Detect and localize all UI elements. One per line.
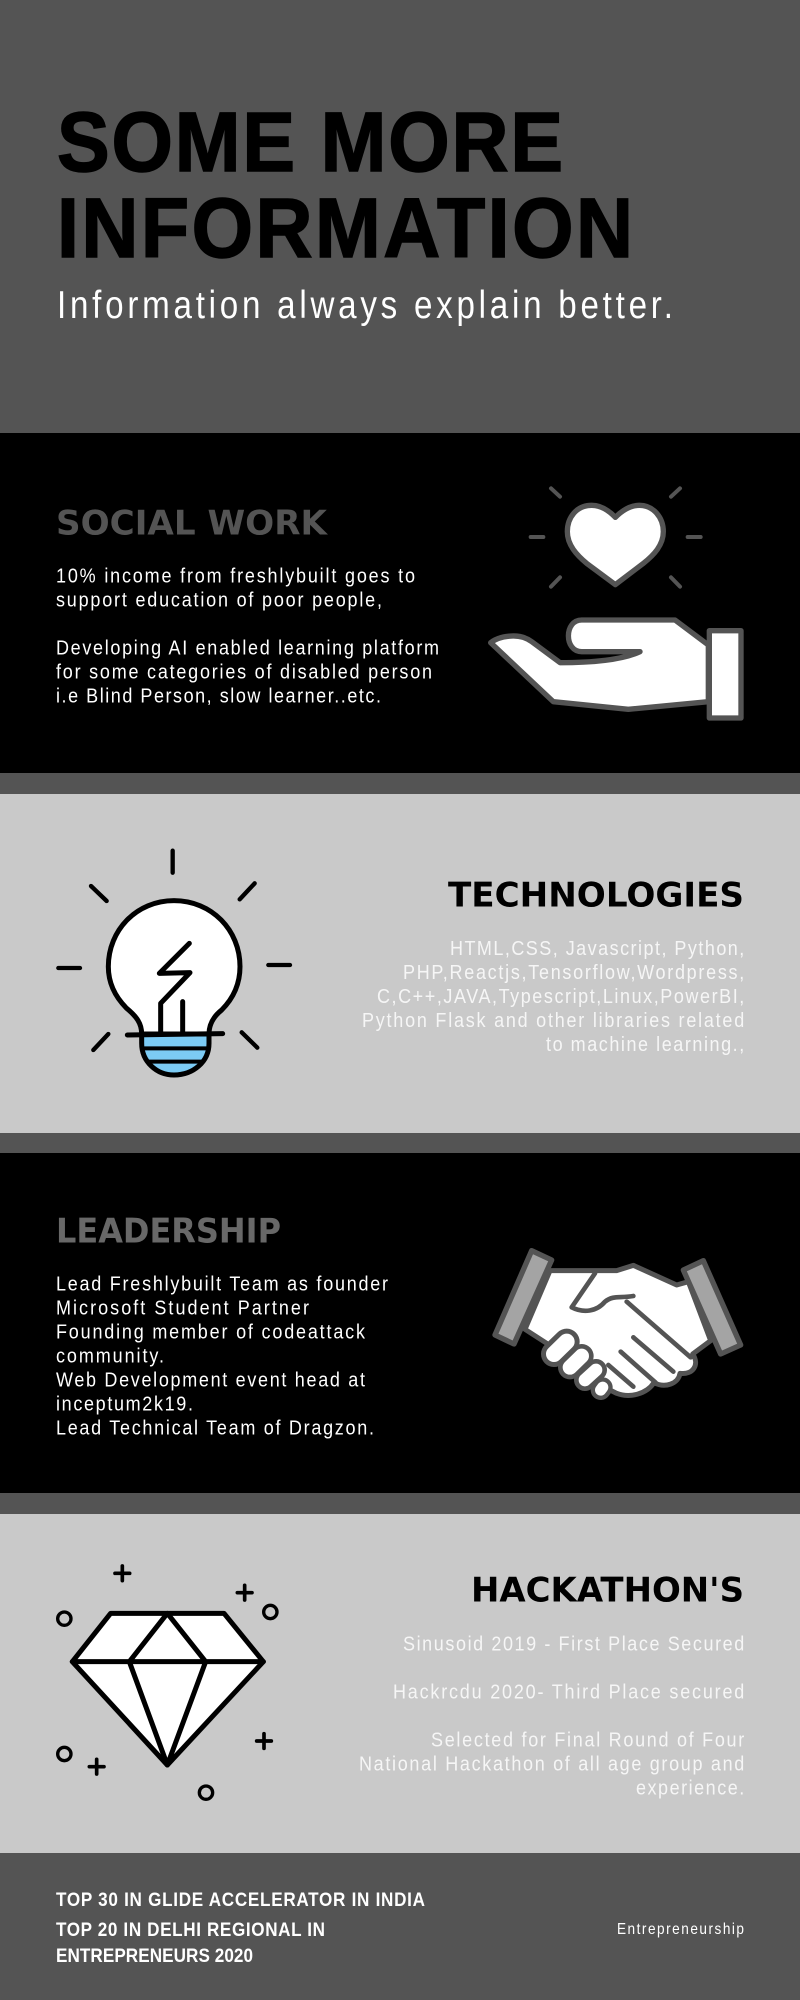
text block: technologies <box>362 938 744 1056</box>
text block: leadership: community. <box>56 1346 164 1368</box>
text block: technologies: to machine learning., <box>546 1034 744 1056</box>
text block: social work <box>56 566 439 708</box>
icon: light bulb <box>58 851 290 1075</box>
text block: social work: 10% income from freshlybuilt goes to <box>56 566 415 588</box>
panel: social work <box>0 433 800 773</box>
heading: hackathons: HACKATHON'S <box>471 1571 744 1610</box>
text block: leadership: Lead Technical Team of Dragzon. <box>56 1418 374 1440</box>
text block: leadership <box>56 1274 389 1440</box>
text block: leadership: Microsoft Student Partner <box>56 1298 310 1320</box>
footer tag: Entrepreneurship <box>617 1921 744 1938</box>
text block: technologies: HTML,CSS, Javascript, Python, <box>450 938 744 960</box>
text block: hackathons: Sinusoid 2019 - First Place Secured <box>403 1634 744 1656</box>
text block: leadership: inceptum2k19. <box>56 1394 193 1416</box>
heading: leadership: LEADERSHIP <box>56 1212 281 1251</box>
text block: hackathons: National Hackathon of all age group and <box>359 1754 744 1776</box>
title: SOME MORE <box>57 96 563 190</box>
text block: hackathons: Selected for Final Round of Four <box>431 1730 745 1752</box>
icon: diamond <box>58 1566 277 1799</box>
text block: social work: Developing AI enabled learning platform <box>56 638 439 660</box>
text block: technologies: C,C++,JAVA,Typescript,Linux,PowerBI, <box>377 986 744 1008</box>
text block: leadership: Lead Freshlybuilt Team as founder <box>56 1274 389 1296</box>
text block: technologies: PHP,Reactjs,Tensorflow,Wordpress, <box>403 962 744 984</box>
footer achievements <box>56 1889 425 1966</box>
title <box>57 96 633 276</box>
panel: footer <box>0 1853 800 2000</box>
text block: hackathons: Hackrcdu 2020- Third Place secured <box>393 1682 744 1704</box>
footer achievements: TOP 30 IN GLIDE ACCELERATOR IN INDIA <box>56 1889 425 1910</box>
text block: hackathons <box>359 1634 745 1800</box>
text block: technologies: Python Flask and other libraries related <box>362 1010 744 1032</box>
panel: technologies <box>0 794 800 1133</box>
heading: social work: SOCIAL WORK <box>56 504 329 542</box>
footer achievements: TOP 20 IN DELHI REGIONAL IN <box>56 1919 325 1940</box>
text block: social work: i.e Blind Person, slow learner..etc. <box>56 686 381 708</box>
text block: leadership: Founding member of codeattack <box>56 1322 365 1344</box>
text block: hackathons: experience. <box>636 1778 744 1800</box>
text block: social work: for some categories of disabled person <box>56 662 432 684</box>
panel: leadership <box>0 1153 800 1493</box>
panel: hackathons <box>0 1514 800 1853</box>
subtitle: Information always explain better. <box>57 282 673 327</box>
title: INFORMATION <box>57 182 633 276</box>
icon: handshake <box>495 1251 741 1395</box>
text block: social work: support education of poor people, <box>56 590 382 612</box>
footer achievements: ENTREPRENEURS 2020 <box>56 1945 253 1966</box>
heading: technologies: TECHNOLOGIES <box>448 876 744 915</box>
text block: leadership: Web Development event head at <box>56 1370 366 1392</box>
panel: header <box>0 0 800 433</box>
icon: hand holding heart <box>491 488 741 718</box>
